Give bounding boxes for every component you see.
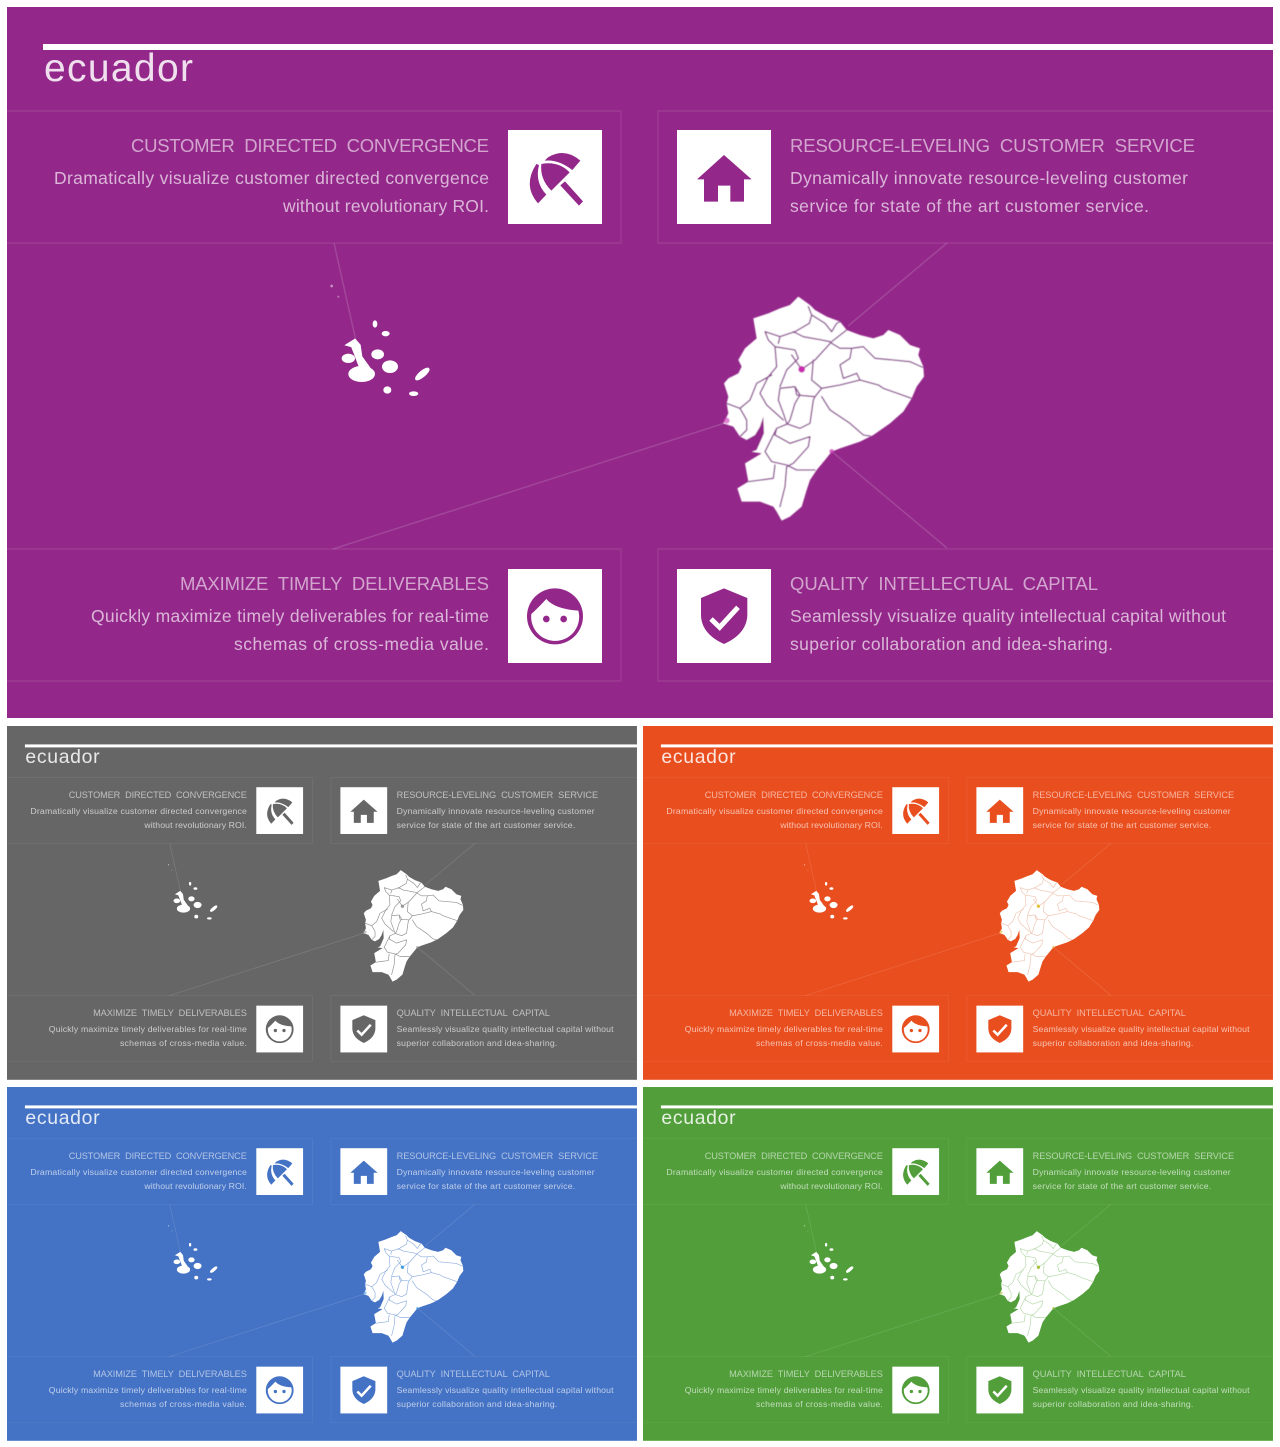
text block: service for state of the art customer service.	[1033, 820, 1211, 830]
panel: resource-leveling customer service	[340, 787, 598, 834]
panel: quality intellectual capital	[677, 569, 1226, 663]
text block: superior collaboration and idea-sharing.	[1033, 1399, 1193, 1409]
text block: Dramatically visualize customer directed convergence	[30, 806, 247, 816]
heading: CUSTOMER DIRECTED CONVERGENCE	[131, 135, 489, 156]
text block: superior collaboration and idea-sharing.	[397, 1399, 557, 1409]
heading: CUSTOMER DIRECTED CONVERGENCE	[69, 1151, 247, 1161]
panel frames	[643, 778, 1273, 1061]
text block: Quickly maximize timely deliverables for real-time	[49, 1024, 247, 1034]
text block: schemas of cross-media value.	[756, 1399, 883, 1409]
heading: MAXIMIZE TIMELY DELIVERABLES	[93, 1008, 247, 1018]
map: Ecuador mainland	[723, 297, 924, 521]
text block: Dramatically visualize customer directed convergence	[666, 806, 883, 816]
text block: schemas of cross-media value.	[756, 1038, 883, 1048]
text block: without revolutionary ROI.	[143, 820, 247, 830]
icon: shield	[677, 569, 771, 663]
heading: MAXIMIZE TIMELY DELIVERABLES	[93, 1369, 247, 1379]
header rule	[25, 1105, 637, 1108]
panel: quality intellectual capital	[340, 1006, 614, 1052]
panel: maximize timely deliverables	[91, 569, 602, 663]
icon: house	[340, 1148, 387, 1195]
map: Ecuador mainland	[363, 870, 463, 982]
text block	[30, 1167, 247, 1191]
panel frames	[643, 1139, 1273, 1422]
text block	[1033, 1167, 1231, 1191]
text block	[30, 806, 247, 830]
title: ecuador	[25, 1107, 100, 1129]
map: Ecuador mainland	[999, 870, 1099, 982]
map: Galapagos islands	[330, 285, 430, 395]
connector lines	[169, 843, 475, 996]
icon: face	[892, 1006, 939, 1052]
connector lines	[333, 243, 947, 549]
text block: Seamlessly visualize quality intellectual capital without	[397, 1385, 614, 1395]
text block: schemas of cross-media value.	[120, 1038, 247, 1048]
icon: house	[340, 787, 387, 834]
slide background	[7, 7, 1273, 718]
heading: QUALITY INTELLECTUAL CAPITAL	[790, 573, 1098, 594]
panel: maximize timely deliverables	[685, 1367, 939, 1413]
icon: house	[976, 1148, 1023, 1195]
text block: Quickly maximize timely deliverables for real-time	[685, 1024, 883, 1034]
header rule	[43, 44, 1273, 50]
text block: superior collaboration and idea-sharing.	[1033, 1038, 1193, 1048]
slide background	[643, 726, 1273, 1080]
text block	[666, 1167, 883, 1191]
icon: umbrella	[256, 787, 303, 834]
text block: Seamlessly visualize quality intellectual capital without	[397, 1024, 614, 1034]
text block	[397, 806, 595, 830]
icon: shield	[340, 1006, 387, 1052]
text block: Dynamically innovate resource-leveling customer	[397, 806, 595, 816]
title: ecuador	[661, 746, 736, 768]
text block	[790, 168, 1188, 216]
slide: gray variant	[7, 726, 637, 1080]
slide background	[7, 726, 637, 1080]
panel: maximize timely deliverables	[49, 1367, 303, 1413]
text block: Dynamically innovate resource-leveling customer	[1033, 1167, 1231, 1177]
text block	[666, 806, 883, 830]
panel: resource-leveling customer service	[976, 787, 1234, 834]
panel: resource-leveling customer service	[340, 1148, 598, 1195]
icon: face	[508, 569, 602, 663]
heading: MAXIMIZE TIMELY DELIVERABLES	[180, 573, 489, 594]
heading: MAXIMIZE TIMELY DELIVERABLES	[729, 1369, 883, 1379]
icon: face	[256, 1006, 303, 1052]
heading: RESOURCE-LEVELING CUSTOMER SERVICE	[1033, 790, 1234, 800]
text block	[49, 1024, 247, 1048]
map: Galapagos islands	[804, 1225, 854, 1280]
text block: without revolutionary ROI.	[282, 196, 489, 216]
panel: quality intellectual capital	[340, 1367, 614, 1413]
text block	[397, 1024, 614, 1048]
text block: Dramatically visualize customer directed convergence	[30, 1167, 247, 1177]
text block: superior collaboration and idea-sharing.	[790, 634, 1113, 654]
heading: RESOURCE-LEVELING CUSTOMER SERVICE	[790, 135, 1195, 156]
map: Ecuador mainland	[363, 1231, 463, 1343]
text block: Seamlessly visualize quality intellectual capital without	[790, 606, 1226, 626]
text block: schemas of cross-media value.	[120, 1399, 247, 1409]
icon: umbrella	[508, 130, 602, 224]
connector lines	[805, 1204, 1111, 1357]
title: ecuador	[44, 47, 193, 90]
text block: Quickly maximize timely deliverables for real-time	[91, 606, 489, 626]
text block: Dynamically innovate resource-leveling customer	[397, 1167, 595, 1177]
icon: house	[976, 787, 1023, 834]
text block	[790, 606, 1226, 654]
text block	[1033, 1385, 1250, 1409]
panel: customer directed convergence	[30, 1148, 303, 1195]
panel: resource-leveling customer service	[976, 1148, 1234, 1195]
heading: RESOURCE-LEVELING CUSTOMER SERVICE	[397, 1151, 598, 1161]
slide: purple main	[7, 7, 1273, 718]
panel frames	[7, 1139, 637, 1422]
text block: Dynamically innovate resource-leveling customer	[790, 168, 1188, 188]
heading: QUALITY INTELLECTUAL CAPITAL	[397, 1008, 550, 1018]
slide: blue variant	[7, 1087, 637, 1441]
header rule	[25, 744, 637, 747]
text block: Seamlessly visualize quality intellectual capital without	[1033, 1024, 1250, 1034]
heading: QUALITY INTELLECTUAL CAPITAL	[397, 1369, 550, 1379]
slide: orange variant	[643, 726, 1273, 1080]
panel: quality intellectual capital	[976, 1006, 1250, 1052]
panel frames	[7, 778, 637, 1061]
text block: schemas of cross-media value.	[234, 634, 489, 654]
text block: service for state of the art customer service.	[397, 1181, 575, 1191]
connector lines	[169, 1204, 475, 1357]
heading: RESOURCE-LEVELING CUSTOMER SERVICE	[397, 790, 598, 800]
connector lines	[805, 843, 1111, 996]
heading: QUALITY INTELLECTUAL CAPITAL	[1033, 1008, 1186, 1018]
heading: RESOURCE-LEVELING CUSTOMER SERVICE	[1033, 1151, 1234, 1161]
text block	[91, 606, 489, 654]
icon: face	[892, 1367, 939, 1413]
heading: CUSTOMER DIRECTED CONVERGENCE	[705, 1151, 883, 1161]
map: Galapagos islands	[168, 1225, 218, 1280]
text block: superior collaboration and idea-sharing.	[397, 1038, 557, 1048]
text block	[397, 1385, 614, 1409]
icon: umbrella	[892, 787, 939, 834]
panel: maximize timely deliverables	[49, 1006, 303, 1052]
map: Ecuador mainland	[999, 1231, 1099, 1343]
slide background	[643, 1087, 1273, 1441]
heading: MAXIMIZE TIMELY DELIVERABLES	[729, 1008, 883, 1018]
panel: resource-leveling customer service	[677, 130, 1195, 224]
text block	[685, 1024, 883, 1048]
panel: customer directed convergence	[666, 1148, 939, 1195]
header rule	[661, 1105, 1273, 1108]
text block: service for state of the art customer service.	[397, 820, 575, 830]
panel: quality intellectual capital	[976, 1367, 1250, 1413]
text block	[49, 1385, 247, 1409]
text block	[397, 1167, 595, 1191]
panel: customer directed convergence	[666, 787, 939, 834]
heading: QUALITY INTELLECTUAL CAPITAL	[1033, 1369, 1186, 1379]
icon: umbrella	[892, 1148, 939, 1195]
text block	[1033, 806, 1231, 830]
panel: customer directed convergence	[30, 787, 303, 834]
slide: green variant	[643, 1087, 1273, 1441]
map: Galapagos islands	[168, 864, 218, 919]
text block: Quickly maximize timely deliverables for real-time	[685, 1385, 883, 1395]
header rule	[661, 744, 1273, 747]
text block	[1033, 1024, 1250, 1048]
icon: shield	[976, 1367, 1023, 1413]
title: ecuador	[661, 1107, 736, 1129]
text block: Seamlessly visualize quality intellectual capital without	[1033, 1385, 1250, 1395]
text block: Dynamically innovate resource-leveling customer	[1033, 806, 1231, 816]
icon: shield	[340, 1367, 387, 1413]
heading: CUSTOMER DIRECTED CONVERGENCE	[69, 790, 247, 800]
slide background	[7, 1087, 637, 1441]
panel: maximize timely deliverables	[685, 1006, 939, 1052]
map: Galapagos islands	[804, 864, 854, 919]
panel: customer directed convergence	[54, 130, 602, 224]
icon: shield	[976, 1006, 1023, 1052]
text block: Dramatically visualize customer directed convergence	[666, 1167, 883, 1177]
panel frames	[7, 111, 1273, 681]
text block: without revolutionary ROI.	[779, 820, 883, 830]
text block	[54, 168, 489, 216]
text block: service for state of the art customer service.	[1033, 1181, 1211, 1191]
icon: house	[677, 130, 771, 224]
icon: face	[256, 1367, 303, 1413]
text block: Quickly maximize timely deliverables for real-time	[49, 1385, 247, 1395]
text block: service for state of the art customer service.	[790, 196, 1149, 216]
text block: without revolutionary ROI.	[143, 1181, 247, 1191]
title: ecuador	[25, 746, 100, 768]
text block	[685, 1385, 883, 1409]
icon: umbrella	[256, 1148, 303, 1195]
heading: CUSTOMER DIRECTED CONVERGENCE	[705, 790, 883, 800]
text block: without revolutionary ROI.	[779, 1181, 883, 1191]
text block: Dramatically visualize customer directed convergence	[54, 168, 489, 188]
